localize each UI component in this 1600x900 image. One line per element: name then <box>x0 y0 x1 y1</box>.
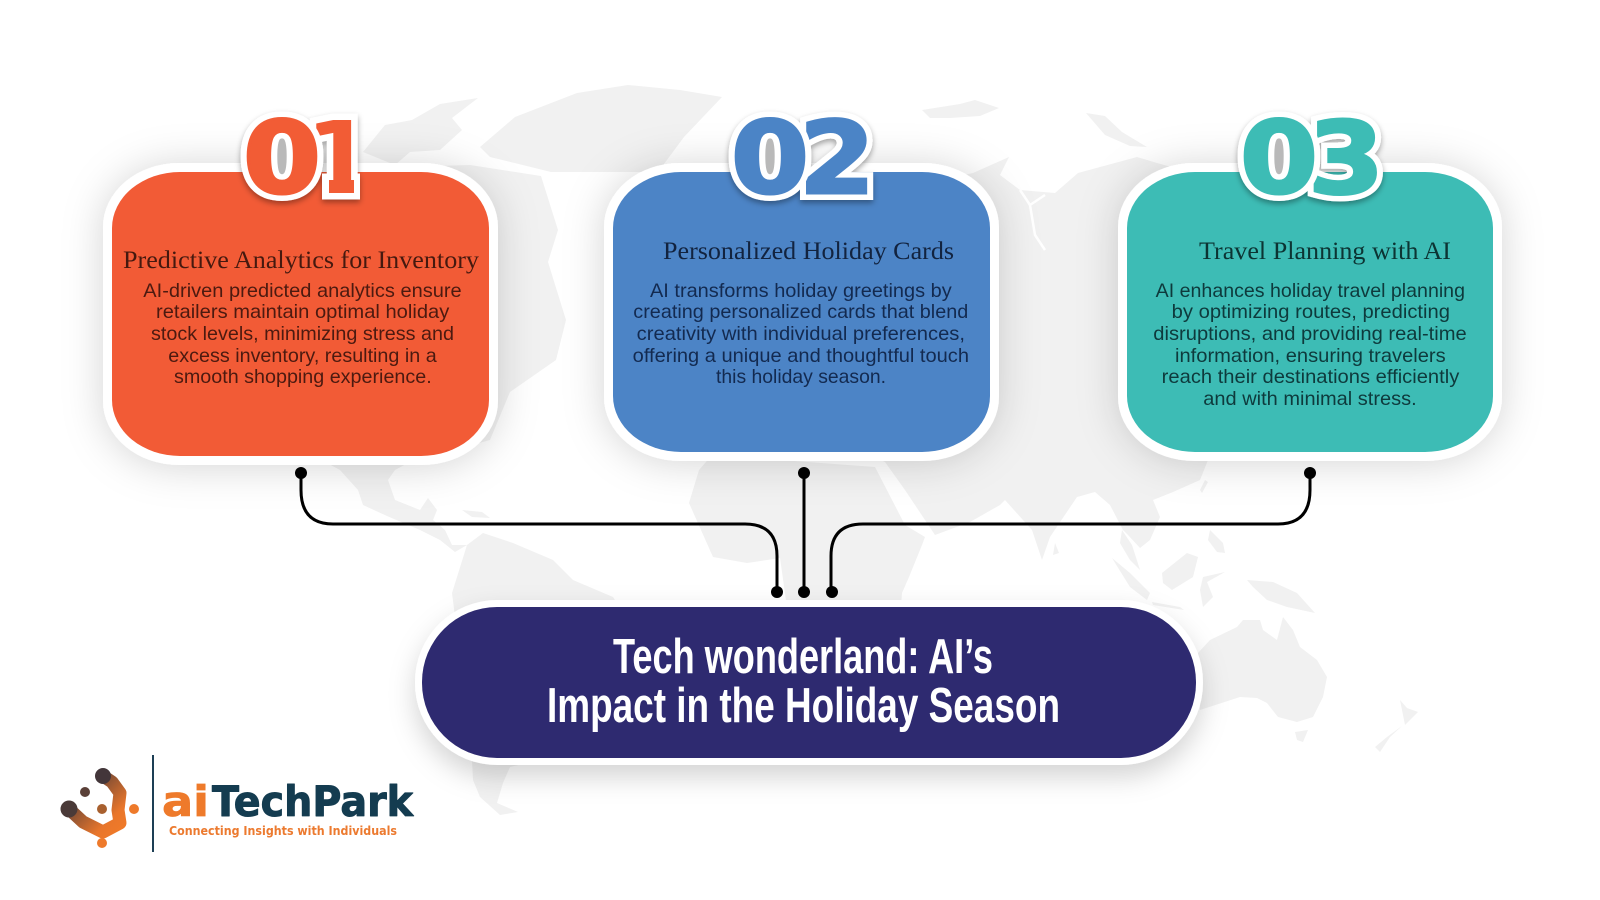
map: Novaya Zemlya islands <box>1086 113 1147 147</box>
card 3 body text <box>1153 280 1467 410</box>
number 01: 1 <box>305 100 375 217</box>
map: New Guinea <box>1247 580 1315 613</box>
card 2 body text: creating personalized cards that blend <box>633 301 968 323</box>
map: South America <box>452 533 640 815</box>
number 02 <box>731 100 875 217</box>
connector: card 2 to title <box>798 467 810 598</box>
logo: aiTechPark <box>60 755 414 852</box>
card 3 body text: information, ensuring travelers <box>1175 345 1446 367</box>
number 02: 0 <box>731 100 809 216</box>
map: Africa <box>689 455 925 700</box>
map: Java <box>1152 602 1184 610</box>
card 3 body text: disruptions, and providing real-time <box>1153 323 1467 345</box>
card 3 body text: by optimizing routes, predicting <box>1172 301 1450 323</box>
map: North America <box>250 165 566 552</box>
panel: card 3 travel planning <box>1118 100 1502 461</box>
map: Borneo <box>1162 553 1198 590</box>
logo wordmark: TechPark <box>212 777 414 826</box>
title text: Impact in the Holiday Season <box>547 679 1060 733</box>
number 02: 2 <box>799 100 875 217</box>
map: Arctic archipelago <box>363 98 478 165</box>
number 01: 1 <box>305 100 375 217</box>
number 03 <box>1240 100 1384 217</box>
connector lines <box>295 467 1316 598</box>
map: Greenland <box>480 85 722 172</box>
card 1 heading: Predictive Analytics for Inventory <box>123 247 480 274</box>
card 1 body text: stock levels, minimizing stress and <box>151 323 454 345</box>
map: Eurasia <box>840 157 1480 560</box>
card 3 heading: Travel Planning with AI <box>1199 238 1451 265</box>
card 2 body text: creativity with individual preferences, <box>637 323 965 345</box>
card 2 body text: this holiday season. <box>716 366 886 388</box>
logo wordmark: ai <box>162 777 209 826</box>
number 03: 0 <box>1240 100 1318 216</box>
number 02: 2 <box>799 100 875 217</box>
panel: card 2 personalized holiday cards <box>604 100 999 461</box>
connector: card 3 to title <box>826 467 1316 598</box>
number 03: 3 <box>1308 100 1384 217</box>
number 02: 0 <box>731 100 809 216</box>
card 2 heading: Personalized Holiday Cards <box>663 238 954 265</box>
map: Cuba <box>462 510 490 518</box>
card 1 body text <box>143 280 462 388</box>
card 1 body text: smooth shopping experience. <box>174 366 432 388</box>
map: Malay peninsula <box>1120 530 1140 570</box>
card 3 body text: reach their destinations efficiently <box>1162 366 1460 388</box>
map: Philippines <box>1208 530 1225 553</box>
logo icon <box>60 768 139 848</box>
map: Sumatra <box>1112 558 1150 600</box>
card 3 body text: AI enhances holiday travel planning <box>1156 280 1465 302</box>
card 1 body text: excess inventory, resulting in a <box>168 345 437 367</box>
map: New Zealand <box>1375 700 1418 752</box>
card 2 body text: AI transforms holiday greetings by <box>650 280 952 302</box>
number 01 <box>237 111 364 208</box>
panel: card 1 predictive analytics <box>103 100 498 465</box>
connector: card 1 to title <box>295 467 783 598</box>
card 1 body text: retailers maintain optimal holiday <box>156 301 450 323</box>
map: Taiwan <box>1200 480 1208 493</box>
card 1 body text: AI-driven predicted analytics ensure <box>143 280 462 302</box>
number 03: 3 <box>1308 100 1384 217</box>
card 3 body text: and with minimal stress. <box>1203 388 1417 410</box>
map: Sulawesi <box>1200 572 1225 607</box>
title text <box>547 630 1060 733</box>
number 01: 0 <box>243 100 321 216</box>
title pill <box>415 600 1203 765</box>
map: Tasmania <box>1295 730 1308 742</box>
world map background <box>250 85 1480 815</box>
title text: Tech wonderland: AI’s <box>613 630 993 684</box>
card 2 body text: offering a unique and thoughtful touch <box>633 345 969 367</box>
number 03: 0 <box>1240 100 1318 216</box>
card 2 body text <box>633 280 969 388</box>
logo wordmark <box>162 777 414 838</box>
map: Svalbard islands <box>922 100 999 118</box>
map: Sri Lanka <box>1053 543 1059 555</box>
logo wordmark: Connecting Insights with Individuals <box>169 823 397 838</box>
number 01: 0 <box>243 100 321 216</box>
map: Australia <box>1198 617 1327 722</box>
